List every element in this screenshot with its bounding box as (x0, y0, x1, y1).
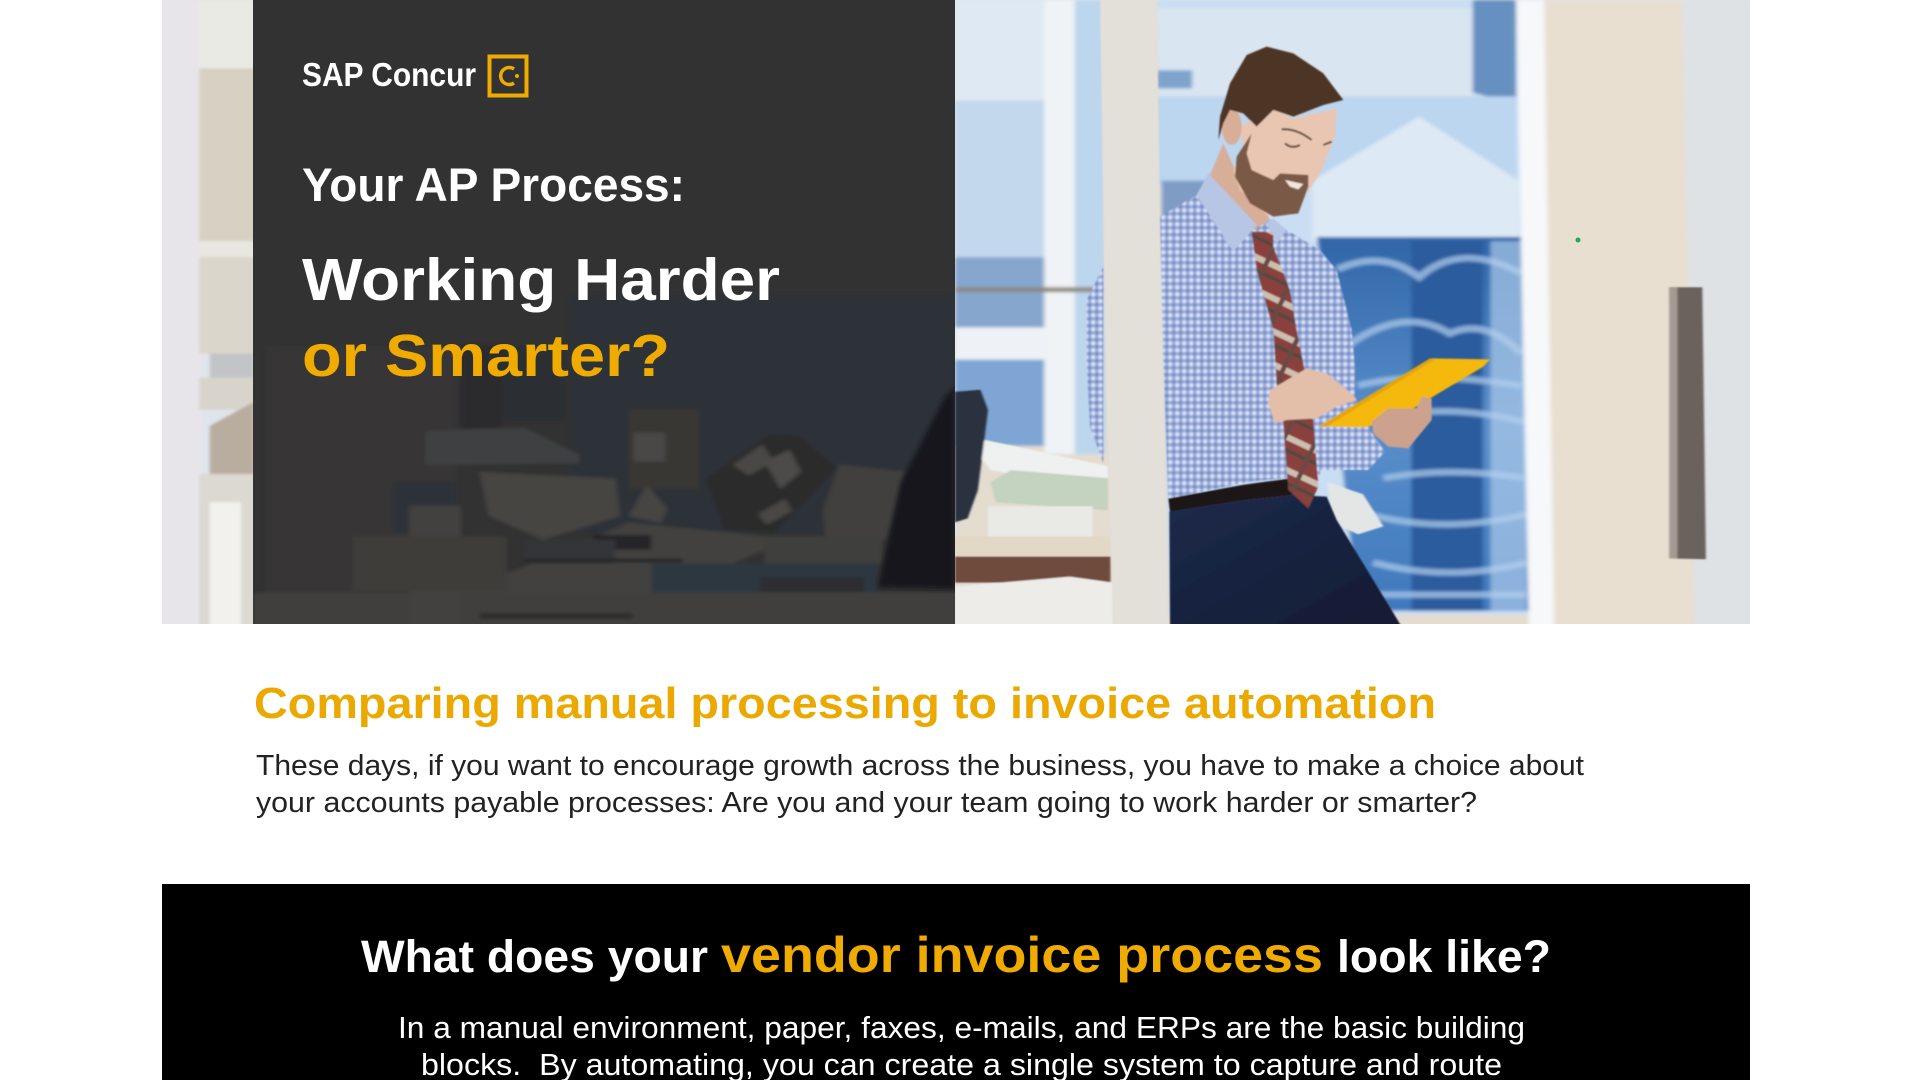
band heading: What does your (361, 931, 708, 982)
faded chair (878, 387, 955, 589)
neck (1210, 143, 1270, 230)
ear (1222, 108, 1242, 145)
tie (1252, 232, 1318, 508)
intro paragraph: your accounts payable processes: Are you and your team going to work harder or smarter? (256, 787, 1477, 819)
sleeve behind pillar (1087, 267, 1103, 463)
title: kicker: Your AP Process: (302, 158, 685, 211)
hair (1218, 47, 1343, 140)
faded office scene (254, 428, 955, 624)
title: main line: Working Harder (302, 247, 780, 313)
intro paragraph (256, 750, 1584, 819)
jeans (1169, 495, 1402, 627)
icon: Concur logo (490, 56, 526, 96)
band heading: look like? (1337, 931, 1551, 982)
tablet (1318, 358, 1490, 427)
photo: office window and wall (955, 0, 1761, 633)
section heading: Comparing manual processing to invoice automation (254, 679, 1436, 728)
belt (1168, 478, 1293, 512)
wooden pillar (1100, 0, 1168, 630)
photo: door handle (1669, 287, 1706, 559)
dark title panel (253, 0, 959, 632)
photo: desk and papers (955, 390, 1383, 633)
photo: man with yellow tablet (1087, 0, 1490, 630)
hands (1268, 368, 1357, 423)
intro paragraph: These days, if you want to encourage growth across the business, you have to make a choice about (256, 750, 1584, 782)
SAP Concur wordmark: SAP Concur (302, 56, 476, 93)
collar (1197, 173, 1257, 252)
beard (1235, 133, 1308, 217)
band paragraph: In a manual environment, paper, faxes, e-mails, and ERPs are the basic building (398, 1010, 1525, 1045)
black band (162, 884, 1750, 1080)
hero photo panel (155, 0, 1761, 633)
band heading: vendor invoice process (721, 927, 1323, 983)
brows and eye (1282, 129, 1332, 147)
shirt (1160, 173, 1385, 498)
face (1233, 108, 1337, 215)
photo: left foreground office (162, 1, 253, 624)
band heading (361, 927, 1551, 983)
band paragraph (398, 1010, 1525, 1080)
photo: wall pin (1576, 238, 1580, 242)
title: highlighted line: or Smarter? (302, 323, 670, 389)
